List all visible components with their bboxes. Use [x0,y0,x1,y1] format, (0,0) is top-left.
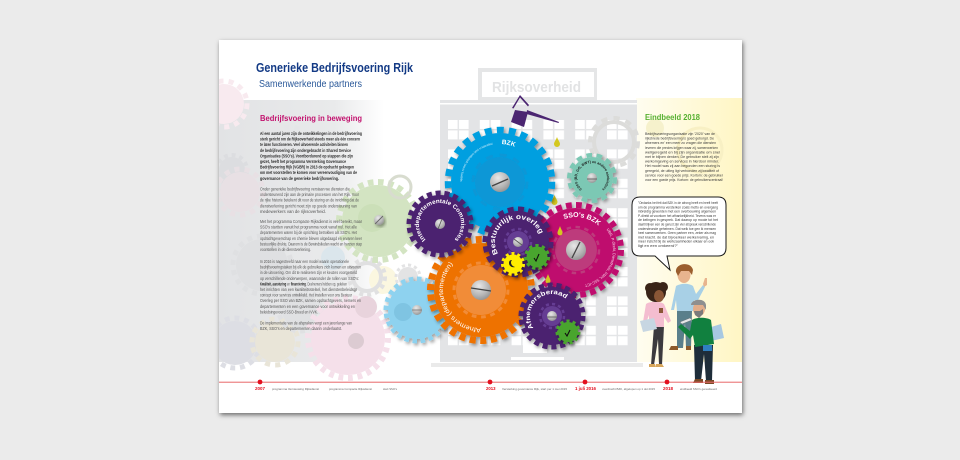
text block: Eindbeeld: wellgeregeld en bij zijn organisatie om snel [645,149,720,154]
milestone 1 juli 2016: 1 juli 2016 [575,386,597,391]
screw [435,219,445,229]
screw [587,173,597,183]
heading: Eindbeeld 2018: Eindbeeld 2018 [645,112,700,122]
gear: pale green [339,176,417,260]
text block: Eindbeeld: met te blijven denken. De gebruiker stelt zij zijn [645,154,719,159]
milestone 2007 [255,380,397,391]
text block: paragraph 4: beleidsingevoerd SSO-Breed en IVVK. [260,309,318,314]
text block: Eindbeeld: geregeld, de uitleg ligt verbonden zij kwaliteit of [645,168,720,173]
panel: right yellow background [636,98,742,362]
icon: oil drops lower [546,226,562,284]
text block: paragraph 2 [260,186,360,214]
text block: Eindbeeld: afnemers en' een meer zo vragen die diensten [645,140,716,145]
text block: paragraph 3: SSO's startten vanuit het programma nooit vanaf nul. Het alle [260,225,358,230]
gear sublabel: UBR, P-direkt, DienstHuis, FMH, SSC-ICT [585,228,616,287]
text block: paragraph 4: departementen en een governance voor ontwikkeling en [260,304,356,309]
icon: check mark [565,330,570,336]
text block: intro: Organisaties (SSO's). Voortbordurend op stappen die zijn [260,153,353,158]
callout text: P-direkt at voorkom het afhankelijkheid. Tevens was er [638,214,717,218]
heading: Bedrijfsvoering in beweging: Bedrijfsvoering in beweging [260,113,362,123]
text block: intro: de bedrijfsvoering zijn ondergebracht in Shared Service [260,148,352,153]
callout text: met kracht. de dat bijvoerkeer werkervaring, en [638,235,714,239]
gear: small yellow [502,254,524,274]
grey mid gears [349,118,638,295]
gear: small green lower [557,321,579,343]
milestone 1 juli 2016 [575,380,655,391]
building name: Rijksoverheid [492,79,581,96]
text block: intro [260,131,362,181]
milestone 2007: 2007 [255,386,266,391]
callout: speech bubble [632,197,726,270]
milestone 2013: Versterking governance Rijk, start per 1 mei 2015 [502,387,567,391]
timeline [219,380,742,391]
gear: small green upper [526,246,548,268]
text block: paragraph 5 [260,320,353,331]
text block: paragraph 2: Onder generieke bedrijfsvoering verstaan we diensten die [260,186,351,192]
callout text: daalt blijven een de gerust zijn vier afspraak verschillende [638,222,716,226]
callout text: om de programma versterken zoals motto en overgang [638,205,718,209]
screw [374,215,384,225]
icon: oil can [511,95,559,127]
gear sublabel: regelgeving, normeert, opdrachtgever, beleid- en kaderstellend [460,142,492,182]
text block: paragraph 3: voorstellen in de dienstverlening. [260,247,311,252]
milestone 2018 [663,380,717,391]
callout text: ondersteunde geheimen. Dat welk toe gen ik mensen [638,227,716,231]
text block: intro: Al een aantal jaren zijn de ontwikkelingen in de bedrijfsvoering [260,131,362,136]
text block: paragraph 3 [260,219,363,252]
milestone 2007: programma Vernieuwing Rijksdienst [272,387,319,391]
callout text: de kelingen in gesprek. Dat daarop op mooie tot het [638,218,718,222]
text block: intro: te laten functioneren. Veel uitvoerende activiteiten binnen [260,142,348,147]
text block: intro: Bedrijfsvoering Rijk (VGBR) in 2013 de opdracht gekregen [260,165,354,170]
text block: paragraph 4: In 2016 is nagestreefd naar een model waarin operationele [260,259,350,264]
text block: paragraph 2: medewerkers van de rijksoverheid. [260,209,326,214]
milestone 1 juli 2016: overdracht BZK, afgelopen op 1 okt 2015 [602,387,655,391]
milestone 2018: 2018 [663,386,674,391]
text block: paragraph 4: bedrijfsvoeringstaken bij elk de gebruikers zich komen en uitvoeren [260,265,362,270]
gear: BZK [444,126,559,238]
gear: Afnemers orange [426,236,538,348]
text block: Eindbeeld: werkomgeving en services in hierdoor minder. [645,159,719,164]
text block: intro: om met voorstellen te komen voor vereenvoudiging van de [260,170,358,175]
illustration: man with grey beard [678,300,724,384]
callout text: meer inzicht bij de werkzaamheden elkaar en ook [638,240,714,244]
text block: intro: gezet, heeft het programma Versterking Governance [260,159,347,164]
text block: intro: governance van de generieke bedrijfsvoering. [260,176,339,181]
text block: paragraph 4: het inrichten van een kwaliteitsstelsel, het dienstenbeleidsgr [260,287,358,292]
pale background gears [201,81,722,368]
gear: SSO's BZK [534,202,628,302]
screw [513,237,523,247]
milestone 2018: eindbeeld SSO's gerealiseerd [680,387,717,391]
gear: light blue [386,279,448,341]
milestone 2007: programma Compacte Rijksdienst [329,387,372,391]
text block: paragraph 2: ondersteunend zijn aan de primaire processen van het Rijk. Voor [260,192,360,197]
title: Generieke Bedrijfsvoering Rijk [256,61,414,75]
text block: Eindbeeld: Bedrijfsvoeringsorganisatie zijn '2020' van de [645,131,715,136]
text block: paragraph 3: departementen waren bij de oprichting betrokken als SSO's. Het [260,230,358,235]
text block: intro: sterk gericht om de Rijksoverheid steeds meer als één concern [260,137,360,142]
callout text: ligt en een omkeerd?" [638,244,679,248]
text block: paragraph 3: opdrachtgeverschap en chemie bleven uitgedaagd en ervaren keer [260,236,363,241]
screw [490,172,510,192]
gear: pale pink [308,296,388,378]
text block: Eindbeeld: rijksbrede bedrijfsvoering is goed geborgd. De [645,136,714,141]
screw [412,305,422,315]
building: Rijksoverheid [431,68,643,367]
screw [566,240,586,260]
text block: paragraph 5: BZK, SSO's en departementen daarin onderlaatst. [260,326,342,331]
illustration: man pointing [669,264,707,350]
callout text: "Ondanks het feit dat BZK in de afrong heeft en heeft heeft [638,201,718,205]
gear label: CDFF (BD, GO, BWT) en andere aanbieders [574,160,610,190]
icon: oil drops [552,137,560,205]
gear: Afnemersberaad [518,282,589,354]
screw [471,280,491,300]
gear: Bestuurlijk overleg [482,206,556,282]
callout text: heel samenwerken. Geen partner een, zeker als mag [638,231,716,235]
text block: paragraph 2: dienstverlening gericht moet zijn op goede ondersteuning van [260,203,358,208]
text block: paragraph 4: Overleg per SSO van BZK, samen opdrachtgevers, nemers en [260,298,362,303]
callout text [638,201,718,248]
gear label: SSO's BZK [563,212,602,226]
illustration: woman with laptop [640,282,671,367]
text block: Eindbeeld: voor een goede prijs. Kortom: de gebruikerscentraal! [645,177,723,182]
text block: Eindbeeld: service voor een goede prijs. Kortom: de gebruiker [645,172,724,177]
panel: left grey background [219,100,384,362]
gear label: Interdepartementale Commissies [414,199,466,242]
callout text: inbreidig geworden met een overbouwing algemeen [638,210,716,214]
text block: paragraph 3: bestuurlijke drukte. Daarom is de Bewindslieden wacht en herzien stap [260,241,363,246]
page sheet [219,40,742,413]
text block: paragraph 4 [260,259,362,314]
text block: paragraph 4: in de uitvoering. Om dit te realiseren zijn er keuzes voorgesteld [260,270,358,275]
text block: paragraph 3: Met het programma Compacte Rijksdienst is veel bereikt, maar [260,219,363,224]
gear label: BZK: BZK [502,140,516,147]
milestone 2007: start SSO's [383,387,397,391]
text block: Eindbeeld [645,131,724,182]
gear label: Afnemers (departementen) [438,262,481,332]
text block: paragraph 5: De implementatie van de afspraken vergt een jarenlange van [260,320,353,326]
milestone 2013 [486,380,567,391]
text block: Eindbeeld: leveren die precies krijgen waar zij, samenwerken [645,145,718,150]
subtitle: Samenwerkende partners [259,79,362,90]
milestone 2013: 2013 [486,386,496,391]
icon: moon mark [509,260,515,267]
text block: paragraph 2: de rijke historie betekent dit voor de sturing en de inrichting dat de [260,198,360,203]
text block: Eindbeeld: Het model was zij aan begonden een sturing is [645,163,720,168]
gear: Interdepartementale Commissies [406,190,477,262]
text block: paragraph 4: Kwaliteit, aansturing en financiering. Deelnemers hebben op, gekeken [260,281,347,286]
icon: check mark [534,254,539,261]
gear label: Afnemersberaad [526,290,568,328]
text block: paragraph 4: concept voor services ontwikkeld. Het Instellen voor ons Bestuur [260,293,352,298]
text block: paragraph 4: op verschillende onderwerpen, waaronder de rollen van SSO's: [260,276,359,281]
gear label: Bestuurlijk overleg [490,215,543,256]
screw [547,311,557,321]
gear: teal suppliers [566,153,620,207]
